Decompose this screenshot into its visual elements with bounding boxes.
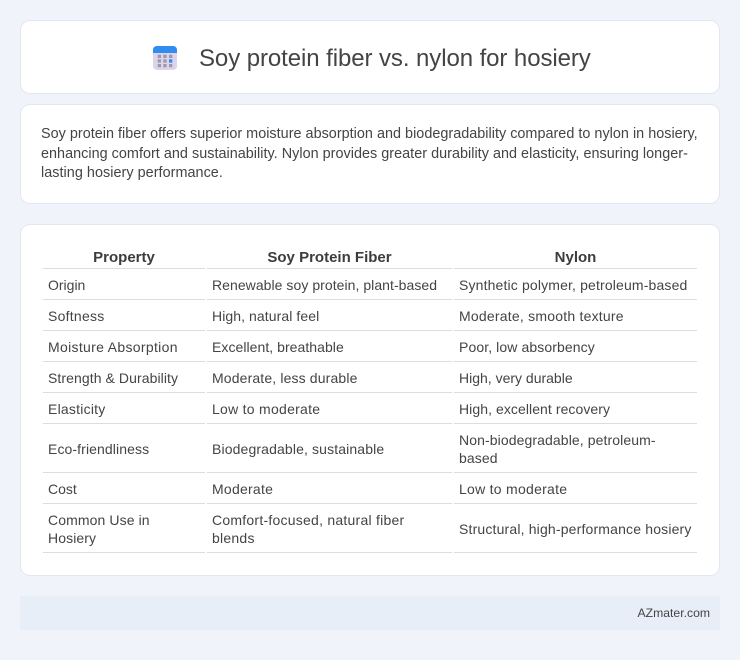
panel: comparison table <box>20 224 720 576</box>
header row <box>93 249 596 266</box>
row: softness: Moderate, smooth texture <box>459 308 624 324</box>
row: common use in hosiery: Structural, high-performance hosiery <box>459 521 692 537</box>
row: origin: Renewable soy protein, plant-based <box>212 277 437 293</box>
row: eco-friendliness: Biodegradable, sustainable <box>212 441 384 457</box>
row: eco-friendliness: Non-biodegradable, petroleum- <box>459 432 656 448</box>
summary text <box>41 126 698 181</box>
row: strength and durability: Moderate, less durable <box>212 370 358 386</box>
row: cost: Low to moderate <box>459 481 567 497</box>
header row: Nylon <box>555 249 596 266</box>
summary text: Soy protein fiber offers superior moisture absorption and biodegradability compared to nylon in hosiery, <box>41 126 698 142</box>
header row: Property <box>93 249 155 266</box>
footer brand: AZmater.com <box>638 606 710 620</box>
row: moisture absorption: Excellent, breathable <box>212 339 344 355</box>
row: common use in hosiery: Common Use in <box>48 512 150 528</box>
row: eco-friendliness: Eco-friendliness <box>48 441 149 457</box>
row: elasticity: Elasticity <box>48 401 106 417</box>
footer <box>20 596 720 630</box>
row: moisture absorption: Moisture Absorption <box>48 339 178 355</box>
row: strength and durability: Strength & Durability <box>48 370 178 386</box>
header row: Soy Protein Fiber <box>267 249 392 266</box>
row: cost: Moderate <box>212 481 273 497</box>
row: softness: High, natural feel <box>212 308 319 324</box>
row: moisture absorption: Poor, low absorbency <box>459 339 595 355</box>
row: elasticity: High, excellent recovery <box>459 401 610 417</box>
row: cost <box>48 481 567 497</box>
row: common use in hosiery: blends <box>212 530 255 546</box>
panel: title card <box>20 20 720 94</box>
summary text: enhancing comfort and sustainability. Nylon provides greater durability and elasticity, ensuring longer- <box>41 146 688 162</box>
icon: calendar <box>153 46 177 70</box>
row: elasticity <box>48 401 610 417</box>
row: origin: Origin <box>48 277 85 293</box>
panel: summary <box>20 104 720 204</box>
row: eco-friendliness: based <box>459 450 498 466</box>
row: strength and durability: High, very durable <box>459 370 573 386</box>
row: common use in hosiery <box>48 512 692 546</box>
row: moisture absorption <box>48 339 595 355</box>
summary text: lasting hosiery performance. <box>41 165 223 181</box>
row: softness: Softness <box>48 308 104 324</box>
row: common use in hosiery: Hosiery <box>48 530 96 546</box>
row: origin: Synthetic polymer, petroleum-based <box>459 277 687 293</box>
row: strength and durability <box>48 370 573 386</box>
row: softness <box>48 308 624 324</box>
row: eco-friendliness <box>48 432 656 466</box>
row: common use in hosiery: Comfort-focused, natural fiber <box>212 512 404 528</box>
title: Soy protein fiber vs. nylon for hosiery <box>199 45 591 72</box>
row: elasticity: Low to moderate <box>212 401 320 417</box>
row: cost: Cost <box>48 481 77 497</box>
comparison table <box>43 249 697 553</box>
row: origin <box>48 277 687 293</box>
